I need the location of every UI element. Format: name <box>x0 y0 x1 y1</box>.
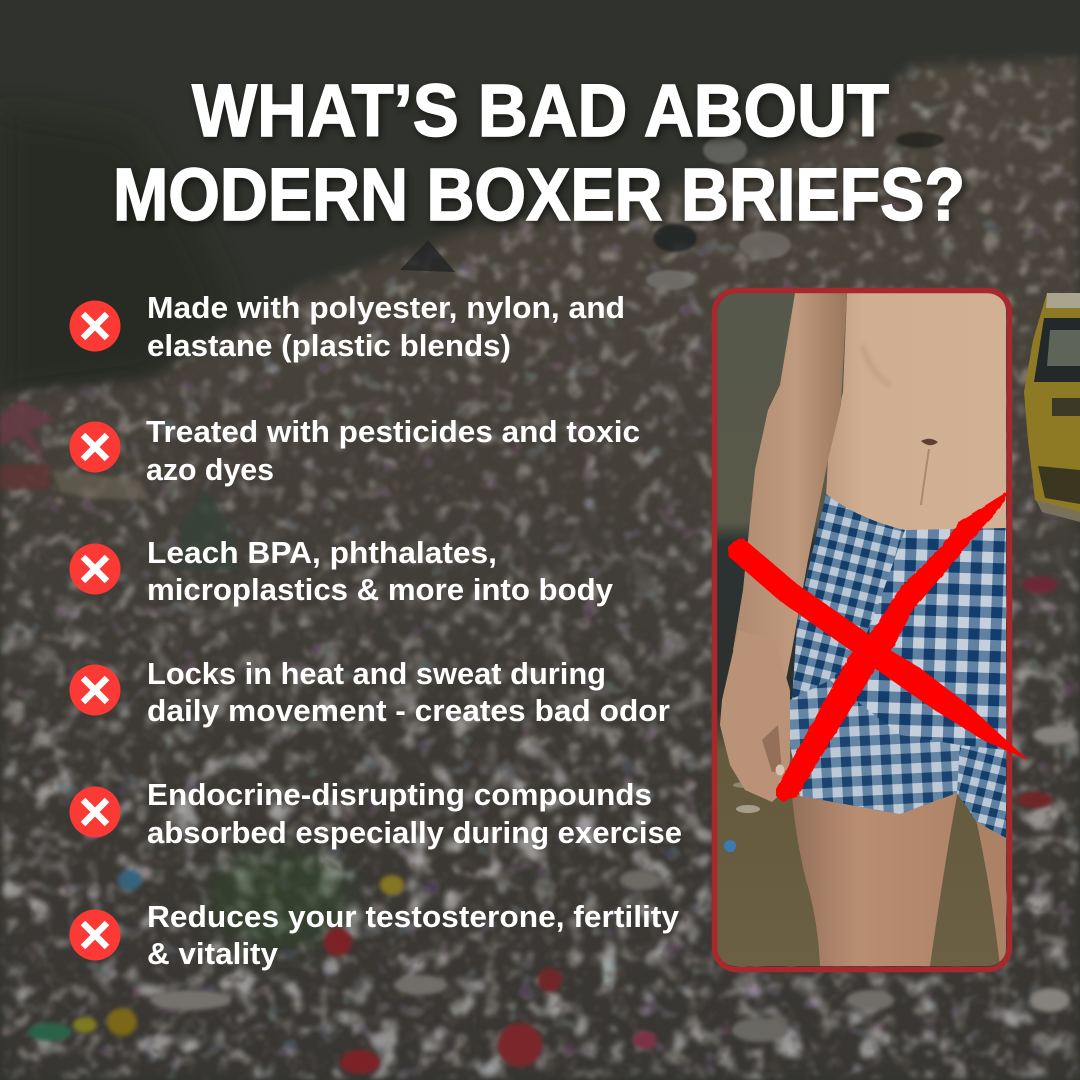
title: MODERN BOXER BRIEFS? <box>113 153 965 236</box>
text: item 4: Locks in heat and sweat during <box>147 656 606 691</box>
text: item 4 <box>147 656 670 728</box>
icon: red x 6 <box>70 910 120 960</box>
dark tree line, upper left <box>0 110 230 400</box>
text: item 5: Endocrine-disrupting compounds <box>147 777 652 812</box>
boxer briefs <box>790 494 1006 838</box>
item 2: pesticides and dyes <box>70 414 640 487</box>
icon: red x 2 <box>70 422 120 472</box>
item 3: chemical leaching <box>70 535 614 607</box>
right rear leg <box>975 815 1006 966</box>
icon: red x 5 <box>70 786 120 838</box>
icon: red x 1 <box>70 300 120 352</box>
item 5: endocrine disruptors <box>70 777 682 850</box>
text: item 2: azo dyes <box>146 452 274 487</box>
text: item 6: Reduces your testosterone, fertility <box>147 899 680 934</box>
item 6: testosterone <box>70 899 680 971</box>
text: item 2: Treated with pesticides and toxic <box>146 414 640 449</box>
text: item 3: Leach BPA, phthalates, <box>147 535 497 570</box>
item 4: heat and sweat <box>70 656 670 728</box>
lower briefs <box>790 680 960 814</box>
text: item 1 <box>147 290 625 363</box>
list of problems <box>70 290 682 971</box>
panel: photo of man in boxer briefs <box>714 290 1010 970</box>
photo backdrop <box>717 293 1006 966</box>
text: item 1: elastane (plastic blends) <box>147 328 511 363</box>
navel <box>921 439 938 445</box>
arm <box>733 293 847 680</box>
text: item 3: microplastics & more into body <box>147 572 614 607</box>
text: item 3 <box>147 535 614 607</box>
excavator, right edge <box>1024 293 1080 522</box>
pink canopy and stalls <box>0 400 55 470</box>
text: item 2 <box>146 414 640 487</box>
icon: red x 4 <box>70 664 120 716</box>
icon: red x 3 <box>70 544 120 594</box>
torso <box>826 293 1006 532</box>
text: item 5 <box>147 777 682 850</box>
front leg <box>792 790 958 966</box>
red x drawn over photo <box>728 490 1028 802</box>
coloured rubbish highlights <box>28 577 1077 1074</box>
title: WHAT’S BAD ABOUT <box>192 69 889 152</box>
text: item 4: daily movement - creates bad odor <box>147 693 670 728</box>
left side of briefs, tighter checks <box>792 494 905 700</box>
text: item 1: Made with polyester, nylon, and <box>147 290 625 325</box>
worker figure <box>175 495 236 570</box>
title <box>113 69 965 236</box>
item 1: plastic blends <box>70 290 625 363</box>
text: item 6: & vitality <box>147 936 279 971</box>
text: item 6 <box>147 899 680 971</box>
dark tent and sacks <box>400 240 455 272</box>
hand <box>720 630 790 802</box>
photo frame <box>714 290 1010 970</box>
green foliage, lower centre <box>210 850 350 950</box>
text: item 5: absorbed especially during exercise <box>147 815 682 850</box>
